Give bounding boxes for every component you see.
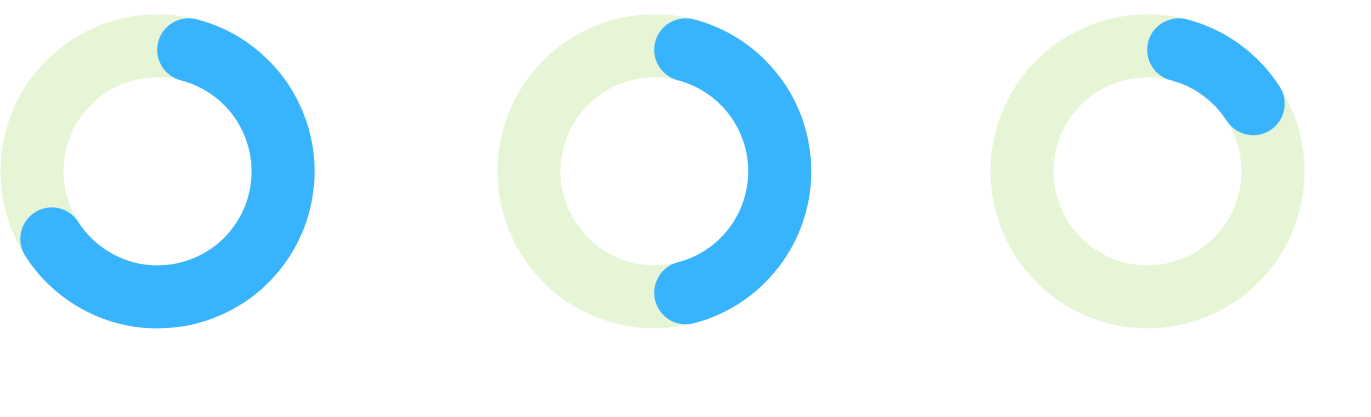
donut 3 progress arc (1179, 50, 1253, 104)
donut 2 progress arc (686, 50, 780, 293)
donut 3 (1022, 46, 1273, 297)
donut 3 track (1022, 46, 1273, 297)
donut 2 (529, 46, 780, 297)
donut 1 progress arc (52, 50, 283, 297)
donut 1 (32, 46, 283, 297)
donut 2 track (529, 46, 780, 297)
donut 1 track (32, 46, 283, 297)
